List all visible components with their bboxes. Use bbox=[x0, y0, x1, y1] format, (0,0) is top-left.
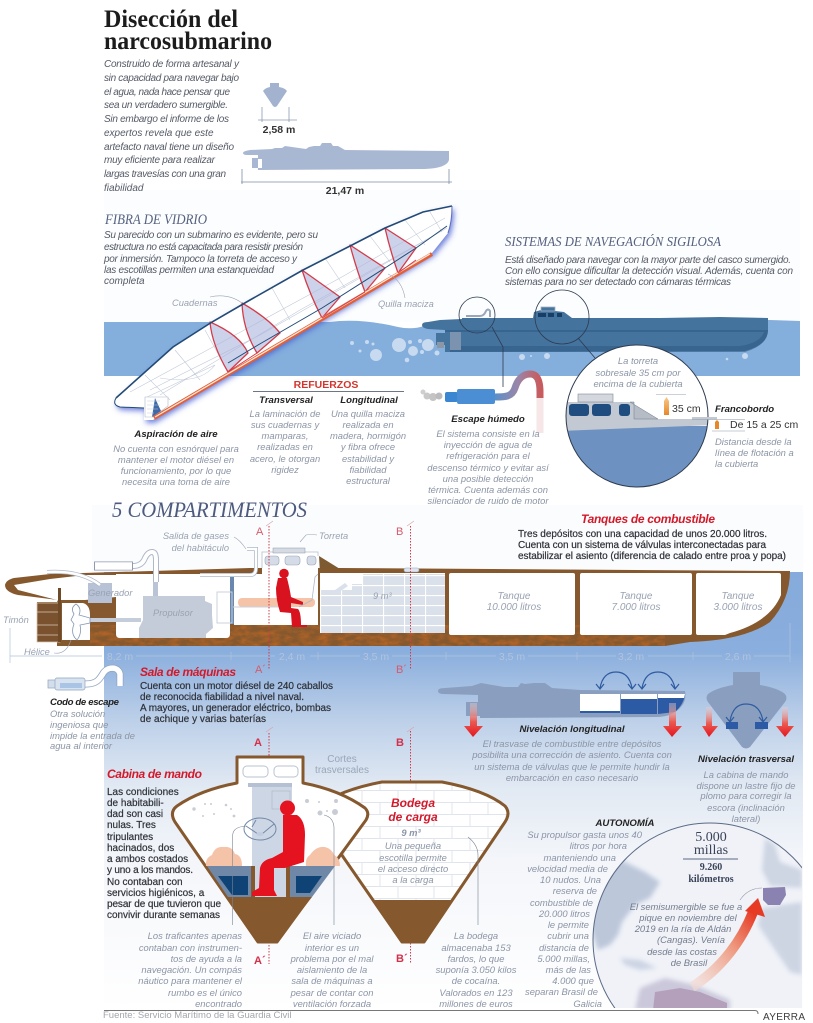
page background tint bbox=[92, 190, 803, 1010]
text: escape húmedo: El sistema consiste en la bbox=[436, 428, 540, 439]
heading and text: nivelación longitudinal bbox=[471, 724, 672, 783]
labels: compartment parts: Torreta bbox=[319, 531, 348, 541]
heading and text: nivelación longitudinal: embarcación en caso necesario bbox=[506, 772, 638, 783]
text: tanques de combustible: estabilizar el asiento (diferencia de calado entre proa y popa) bbox=[518, 551, 786, 562]
text: aspiración de aire: funcionamiento, por lo que bbox=[121, 465, 231, 476]
intro text: Construido de forma artesanal y bbox=[104, 59, 240, 70]
text: francobordo: línea de flotación a bbox=[715, 447, 794, 458]
north america bbox=[594, 860, 661, 951]
label: tanks bbox=[487, 591, 762, 613]
labels: compartment parts: Generador bbox=[88, 588, 133, 598]
footer: Fuente: Servicio Marítimo de la Guardia Civil bbox=[103, 1010, 292, 1021]
text: codo de escape: Codo de escape bbox=[50, 697, 120, 708]
text: escape húmedo: inyección de agua de bbox=[444, 439, 532, 450]
section letters: B bbox=[396, 737, 404, 749]
heading: escape húmedo: Escape húmedo bbox=[451, 414, 525, 425]
text: bodega de carga: Una pequeña bbox=[385, 840, 441, 851]
text: autonomía: 4.000 que bbox=[552, 975, 594, 986]
text: aspiración de aire: mantener el motor diésel en bbox=[118, 454, 234, 465]
text: autonomía: cubrir una bbox=[547, 930, 589, 941]
africa bbox=[758, 902, 802, 975]
labels: compartment parts: del habitáculo bbox=[172, 543, 229, 553]
heading and text: nivelación trasversal: escora (inclinación bbox=[707, 802, 785, 813]
south america bbox=[635, 978, 730, 1010]
icon: side silhouette with 21,47 m length: 21,47 m bbox=[326, 185, 364, 197]
dimension line: 8,2 m bbox=[107, 651, 133, 663]
text: escape húmedo bbox=[427, 428, 550, 506]
refuerzos heading: REFUERZOS bbox=[294, 379, 358, 391]
text: cabina de mando: convivir durante semanas bbox=[107, 910, 220, 921]
footer bbox=[103, 1010, 805, 1023]
text: route bbox=[630, 901, 742, 968]
heading: autonomía: AUTONOMÍA bbox=[595, 818, 655, 829]
text: cabina de mando bbox=[107, 787, 221, 921]
icon: front silhouette with 2,58 m width bbox=[258, 83, 297, 136]
diagram: longitudinal levelling bbox=[438, 672, 685, 737]
heading and text: nivelación trasversal bbox=[696, 754, 796, 824]
heading and text: nivelación trasversal: Nivelación trasversal bbox=[698, 754, 794, 765]
text: francobordo: Distancia desde la bbox=[715, 436, 792, 447]
steering link bbox=[299, 574, 318, 607]
heading and text: nivelación longitudinal: posibilita una corrección de asiento. Cuenta con bbox=[471, 749, 672, 760]
refuerzos: longitudinal: Longitudinal bbox=[340, 395, 398, 406]
text: fibra de vidrio: por inmersión. Tampoco la torreta de acceso y bbox=[103, 254, 298, 265]
text: torreta bbox=[593, 355, 683, 389]
text: cabina de mando: y uno a los mandos. bbox=[107, 865, 193, 876]
text: bodega de carga bbox=[378, 827, 448, 885]
spain bbox=[763, 887, 786, 905]
icon: exhaust elbow bbox=[48, 668, 120, 690]
text: aire viciado: pesar de contar con bbox=[290, 987, 373, 998]
text: autonomía: 10 nudos. Una bbox=[540, 874, 601, 885]
intro text: sea un verdadero sumergible. bbox=[104, 100, 228, 111]
text: sala de máquinas: de achique y varias baterías bbox=[140, 714, 266, 725]
text: sistemas de navegación: Está diseñado para navegar con la mayor parte del casco sumergido. bbox=[505, 255, 791, 266]
intro text: el agua, nada hace pensar que bbox=[104, 87, 230, 98]
section letters: A´ bbox=[254, 955, 266, 967]
text: autonomía: le permite bbox=[548, 919, 589, 930]
benches bbox=[207, 866, 253, 897]
refuerzos: longitudinal: fiabilidad bbox=[349, 464, 387, 475]
text: aspiración de aire: necesita una toma de aire bbox=[122, 476, 230, 487]
icon: wet exhaust pipe bbox=[420, 374, 540, 433]
range figure bbox=[683, 830, 738, 885]
text: autonomía: Su propulsor gasta unos 40 bbox=[527, 829, 643, 840]
text: fibra de vidrio: estructura no está capacitada para resistir presión bbox=[104, 242, 303, 253]
intro text: sin capacidad para navegar bajo bbox=[104, 73, 239, 84]
centre line bbox=[228, 226, 447, 363]
intake detail bbox=[145, 397, 168, 417]
magnifier circles and leader lines bbox=[459, 290, 595, 387]
text: la bodega: suponía 3.050 kilos bbox=[436, 964, 517, 975]
text: escape húmedo: descenso térmico y evitar así bbox=[427, 462, 550, 473]
text: la bodega: Valorados en 123 bbox=[439, 987, 513, 998]
section letters bbox=[254, 733, 408, 967]
francobordo: Francobordo bbox=[715, 404, 774, 415]
refuerzos: longitudinal: estructural bbox=[346, 475, 391, 486]
refuerzos: transversal: realizadas en bbox=[257, 441, 313, 452]
refuerzos: longitudinal: madera, hormigón bbox=[330, 430, 406, 441]
text: bodega de carga: a la carga bbox=[392, 874, 434, 885]
text: autonomía: Galicia bbox=[573, 998, 602, 1009]
text: sala de máquinas: Cuenta con un motor diésel de 240 caballos bbox=[140, 681, 333, 692]
text: la bodega: de cocaína. bbox=[452, 975, 500, 986]
text: codo de escape: agua al interior bbox=[50, 740, 113, 751]
turret outline bbox=[262, 552, 318, 568]
hull shell bbox=[5, 568, 790, 646]
refuerzos: transversal: acero, le otorgan bbox=[250, 453, 320, 464]
text: sala de máquinas: A mayores, un generador eléctrico, bombas bbox=[140, 703, 331, 714]
heading: bodega de carga: de carga bbox=[388, 810, 438, 824]
text: instrumentos bbox=[138, 930, 243, 1009]
label: quilla maciza: Quilla maciza bbox=[378, 299, 434, 309]
icon: side silhouette with 21,47 m length bbox=[241, 143, 452, 197]
text: aire viciado: El aire viciado bbox=[303, 930, 361, 941]
refuerzos: transversal: sus cuadernas y bbox=[251, 419, 320, 430]
label: tanks: 10.000 litros bbox=[487, 602, 541, 613]
text: route: El semisumergible se fue a bbox=[630, 901, 742, 912]
section markers: A bbox=[256, 526, 264, 538]
text: aire viciado: aislamiento de la bbox=[297, 964, 367, 975]
top edge bbox=[116, 206, 452, 398]
text: autonomía: combustible de bbox=[530, 897, 593, 908]
section markers: A´ bbox=[255, 664, 266, 676]
cross-section A: control cabin bbox=[172, 757, 368, 942]
text: autonomía bbox=[525, 829, 643, 1009]
labels: compartment parts: Propulsor bbox=[153, 608, 194, 618]
labels: compartment parts: Hélice bbox=[24, 647, 50, 657]
text: aspiración de aire bbox=[113, 443, 239, 487]
text: tanques de combustible: Tres depósitos con una capacidad de unos 20.000 litros. bbox=[518, 529, 767, 540]
cargo hold bbox=[320, 574, 445, 633]
text: route: 2019 en la ría de Aldán bbox=[634, 923, 731, 934]
text: sala de máquinas: de reconocida fiabilidad a nivel naval. bbox=[140, 692, 304, 703]
text: bodega de carga: el acceso directo bbox=[378, 863, 448, 874]
air particles bbox=[192, 799, 338, 817]
text: autonomía: reserva de bbox=[553, 885, 597, 896]
text: sistemas de navegación: sistemas para no ser detectado con cámaras térmicas bbox=[505, 277, 731, 288]
range figure: kilómetros bbox=[688, 874, 734, 885]
text: autonomía: litros por hora bbox=[570, 840, 627, 851]
text: cabina de mando: servicios higiénicos, a bbox=[107, 888, 205, 899]
text: bodega de carga: 9 m³ bbox=[401, 827, 422, 838]
heading: fibra de vidrio: FIBRA DE VIDRIO bbox=[104, 212, 207, 228]
figure bbox=[252, 800, 305, 896]
label: tanks: Tanque bbox=[620, 591, 653, 602]
text: cabina de mando: hacinados, dos bbox=[107, 843, 174, 854]
turret hatch and windows bbox=[273, 548, 305, 553]
propulsor bbox=[139, 596, 213, 638]
text: cabina de mando: tripulantes bbox=[107, 832, 153, 843]
text: autonomía: 5.000 millas, bbox=[537, 953, 590, 964]
text: codo de escape: impide la entrada de bbox=[50, 730, 135, 741]
text: aspiración de aire: No cuenta con esnórquel para bbox=[113, 443, 239, 454]
text: instrumentos: náutico para mantener el bbox=[138, 975, 243, 986]
text: aire viciado: problema por el mal bbox=[290, 953, 374, 964]
heading and text: nivelación trasversal: plomo para corregir la bbox=[699, 790, 792, 801]
propeller bbox=[71, 604, 90, 640]
text: francobordo bbox=[715, 436, 794, 469]
text: instrumentos: rumbo es el único bbox=[168, 987, 242, 998]
intro text: Sin embargo el informe de los bbox=[104, 114, 229, 125]
crew bunk bbox=[238, 598, 315, 607]
dimension line: 2,4 m bbox=[279, 651, 305, 663]
heading: bodega de carga bbox=[388, 796, 438, 824]
text: escape húmedo: una posible detección bbox=[443, 473, 533, 484]
heading: aspiración de aire: Aspiración de aire bbox=[133, 429, 218, 440]
text: instrumentos: contaban con instrumen- bbox=[139, 942, 242, 953]
text: aire viciado: sala de máquinas a bbox=[291, 975, 373, 986]
francobordo: De 15 a 25 cm bbox=[730, 419, 799, 431]
heading and text: nivelación trasversal: La cabina de mando bbox=[704, 769, 788, 780]
bubbles bbox=[350, 335, 748, 362]
text: sistemas de navegación: Con ello consigue dificultar la detección visual. Además, cuenta con bbox=[505, 266, 793, 277]
dimension line: 3,5 m bbox=[363, 651, 389, 663]
label: tanks: 7.000 litros bbox=[612, 602, 660, 613]
diagram: transversal levelling bbox=[702, 672, 794, 748]
sleeping crew bbox=[206, 847, 340, 866]
lens: turret detail: 35 cm bbox=[672, 403, 701, 415]
heading: tanques de combustible: Tanques de combustible bbox=[581, 512, 715, 526]
heading: 5 compartimentos: 5 COMPARTIMENTOS bbox=[112, 497, 307, 522]
text: route: de Brasil bbox=[671, 957, 708, 968]
text: tanques de combustible bbox=[518, 529, 786, 562]
text: escape húmedo: silenciador de ruido de motor bbox=[428, 495, 549, 506]
range figure: 9.260 bbox=[700, 862, 722, 873]
intro text: fiabilidad bbox=[104, 183, 144, 194]
label: tanks: Tanque bbox=[498, 591, 531, 602]
labels: compartment parts: 9 m³ bbox=[373, 591, 392, 601]
refuerzos: longitudinal: y fibra ofrece bbox=[340, 441, 395, 452]
intro text: artefacto naval tiene un diseño bbox=[104, 142, 234, 153]
text: escape húmedo: térmica. Cuenta además con bbox=[428, 484, 548, 495]
range figure: millas bbox=[694, 843, 728, 858]
text: autonomía: distancia de bbox=[539, 942, 589, 953]
refuerzos: transversal bbox=[250, 395, 320, 475]
labels: compartment parts: Salida de gases bbox=[163, 531, 229, 541]
fibreglass hull cutaway bbox=[115, 206, 454, 423]
heading and text: nivelación longitudinal: un sistema de válvulas que le permite hundir la bbox=[474, 761, 670, 772]
hatch on deck bbox=[404, 568, 419, 572]
label: cuadernas: Cuadernas bbox=[172, 298, 218, 308]
europe bbox=[762, 838, 802, 888]
refuerzos: transversal: Transversal bbox=[259, 395, 313, 406]
section markers: B´ bbox=[396, 664, 407, 676]
submarine on water bbox=[422, 307, 768, 352]
exhaust on deck bbox=[466, 310, 490, 317]
rudder box bbox=[37, 603, 60, 642]
text: instrumentos: Los traficantes apenas bbox=[148, 930, 242, 941]
keel bbox=[154, 254, 432, 418]
heading: sistemas de navegación: SISTEMAS DE NAVEGACIÓN SIGILOSA bbox=[505, 233, 721, 250]
text: aire viciado: interior es un bbox=[305, 942, 359, 953]
text: la bodega: fardos, lo que bbox=[448, 953, 504, 964]
frames (cuadernas) bbox=[210, 228, 416, 372]
refuerzos: transversal: rigidez bbox=[271, 464, 299, 475]
text: torreta: sobresale 35 cm por bbox=[596, 367, 681, 378]
heading: bodega de carga: Bodega bbox=[391, 796, 435, 810]
refuerzos: longitudinal bbox=[330, 395, 406, 486]
label: cortes trasversales: trasversales bbox=[315, 765, 369, 776]
text: sala de máquinas bbox=[140, 681, 333, 725]
francobordo bbox=[692, 404, 799, 431]
dimension line: 3,5 m bbox=[499, 651, 525, 663]
refuerzos: longitudinal: Una quilla maciza bbox=[331, 408, 405, 419]
text: escape húmedo: refrigeración para el bbox=[446, 450, 531, 461]
text: fibra de vidrio: completa bbox=[104, 276, 145, 287]
text: instrumentos: tos de ayuda a la bbox=[171, 953, 242, 964]
text: bodega de carga: escotilla permite bbox=[379, 852, 447, 863]
dimension line: 2,6 m bbox=[725, 651, 751, 663]
turret windows bbox=[243, 766, 268, 777]
text: codo de escape: ingeniosa que bbox=[50, 719, 108, 730]
footer: AYERRA bbox=[763, 1012, 805, 1023]
heading and text: nivelación trasversal: lateral) bbox=[732, 813, 760, 824]
range figure: 5.000 bbox=[695, 830, 727, 845]
heading and text: nivelación longitudinal: Nivelación longitudinal bbox=[519, 724, 625, 735]
text: instrumentos: navegación. Un compás bbox=[141, 964, 242, 975]
exhaust muffler bbox=[94, 562, 133, 570]
section markers bbox=[255, 521, 414, 732]
stern pipe bbox=[47, 572, 100, 585]
labels: compartment parts: Timón bbox=[3, 615, 29, 625]
text: torreta: La torreta bbox=[618, 355, 658, 366]
icon: front silhouette with 2,58 m width: 2,58 m bbox=[263, 124, 295, 136]
text: codo de escape: Otra solución bbox=[50, 708, 105, 719]
label: cortes trasversales: Cortes bbox=[327, 754, 357, 765]
intro text: largas travesías con una gran bbox=[104, 169, 226, 180]
text: fibra de vidrio bbox=[103, 230, 318, 287]
text: autonomía: velocidad media de bbox=[527, 863, 608, 874]
refuerzos: longitudinal: realizada en bbox=[342, 419, 394, 430]
labels: compartment parts bbox=[3, 531, 392, 657]
text: tanques de combustible: Cuenta con un sistema de válvulas interconectadas para bbox=[518, 540, 766, 551]
text: cabina de mando: nulas. Tres bbox=[107, 820, 156, 831]
section letters: A bbox=[254, 737, 262, 749]
cross-section B: cargo hold bbox=[316, 731, 508, 963]
text: cabina de mando: pesar de que tuvieron que bbox=[107, 899, 221, 910]
text: cabina de mando: a ambos costados bbox=[107, 854, 188, 865]
text: autonomía: manteniendo una bbox=[544, 852, 616, 863]
section markers: B bbox=[396, 526, 403, 538]
text: francobordo: la cubierta bbox=[715, 458, 758, 469]
text: cabina de mando: No contaban con bbox=[107, 877, 183, 888]
label: cortes trasversales bbox=[315, 754, 369, 776]
generator bbox=[88, 583, 112, 603]
wheel bbox=[244, 818, 276, 840]
text: la bodega: almacenaba 153 bbox=[441, 942, 511, 953]
text: instrumentos: encontrado bbox=[195, 998, 242, 1009]
leader lines bbox=[233, 815, 478, 925]
text: la bodega: millones de euros bbox=[439, 998, 513, 1009]
text: autonomía: más de las bbox=[546, 964, 591, 975]
dimension line: 3,2 m bbox=[618, 651, 644, 663]
callouts: cuadernas and quilla bbox=[210, 274, 405, 303]
text: cabina de mando: Las condiciones bbox=[107, 787, 179, 798]
water band bbox=[104, 320, 800, 376]
refuerzos: transversal: mamparas, bbox=[262, 430, 308, 441]
vent pipe bbox=[200, 549, 256, 575]
heading and text: nivelación trasversal: dispone un lastre fijo de bbox=[696, 780, 796, 791]
refuerzos: longitudinal: estabilidad y bbox=[342, 453, 395, 464]
intro text: muy eficiente para realizar bbox=[104, 155, 216, 166]
route arrow bbox=[692, 912, 753, 987]
text: la bodega bbox=[436, 930, 517, 1009]
text: fibra de vidrio: Su parecido con un submarino es evidente, pero su bbox=[104, 230, 318, 241]
text: autonomía: 20.000 litros bbox=[538, 908, 590, 919]
text: fibra de vidrio: las escotillas permiten una estanqueidad bbox=[104, 265, 274, 276]
heading and text: nivelación longitudinal: El trasvase de combustible entre depósitos bbox=[483, 738, 662, 749]
text: aire viciado bbox=[290, 930, 374, 1009]
label: tanks: 3.000 litros bbox=[714, 602, 762, 613]
title bbox=[104, 6, 272, 55]
heading: sala de máquinas: Sala de máquinas bbox=[140, 665, 236, 679]
cabin figure bbox=[276, 569, 307, 627]
text: route: pique en noviembre del bbox=[638, 912, 738, 923]
label: tanks: Tanque bbox=[722, 591, 755, 602]
title: Disección del bbox=[104, 6, 238, 33]
cabin bulkhead bbox=[230, 574, 234, 624]
heading: cabina de mando: Cabina de mando bbox=[107, 767, 202, 781]
text: la bodega: La bodega bbox=[454, 930, 498, 941]
title: narcosubmarino bbox=[104, 28, 272, 55]
refuerzos: transversal: La laminación de bbox=[250, 408, 320, 419]
compartments bbox=[14, 552, 781, 640]
text: autonomía: separan Brasil de bbox=[525, 986, 598, 997]
section letters: B´ bbox=[396, 953, 408, 965]
intro text bbox=[104, 59, 240, 194]
text: sistemas de navegación bbox=[505, 255, 793, 288]
propeller shaft bbox=[88, 618, 141, 622]
text: torreta: encima de la cubierta bbox=[593, 378, 683, 389]
text: codo de escape bbox=[50, 697, 135, 751]
text: aire viciado: ventilación forzada bbox=[293, 998, 371, 1009]
dimension line bbox=[10, 623, 790, 663]
longitudinal section of hull bbox=[5, 548, 790, 646]
text: route: (Cangas). Venía bbox=[657, 934, 725, 945]
turret slope bbox=[319, 556, 340, 573]
text: cabina de mando: de habitabili- bbox=[107, 798, 164, 809]
text: cabina de mando: dad son casi bbox=[107, 809, 163, 820]
globe map bbox=[592, 822, 802, 1008]
intro text: expertos revela que este bbox=[104, 128, 214, 139]
text: route: desde las costas bbox=[647, 946, 717, 957]
lens: turret detail bbox=[566, 344, 708, 488]
